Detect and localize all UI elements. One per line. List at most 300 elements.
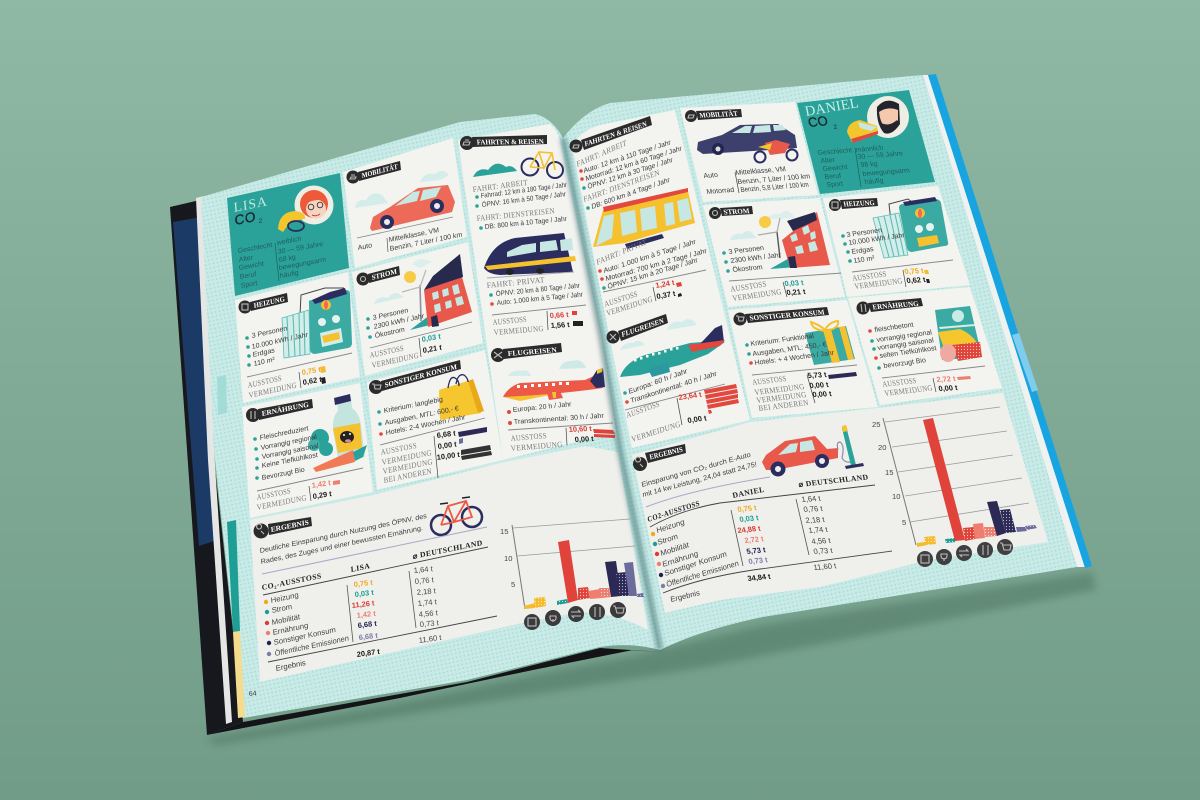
results table: Heizung — [656, 517, 685, 535]
emissions figures: AUSSTOSS — [852, 269, 887, 283]
emissions figures: 0,62 t — [906, 275, 927, 285]
bullet list: Vorrangig saisonal — [262, 443, 319, 461]
results table: 11,60 t — [813, 561, 838, 572]
bullet list — [377, 396, 466, 437]
bullet list: Flugreisen: Europa: 20 h / Jahr — [513, 401, 572, 414]
vehicle data: Mittelklasse, VM — [389, 227, 439, 244]
emissions figures: VERMEIDUNG — [854, 276, 903, 291]
trip list: Arbeit und Dienstreisen: FAHRT: ARBEIT — [576, 137, 627, 169]
emissions figures: 0,00 t — [437, 439, 458, 451]
bullet list — [722, 245, 782, 274]
bullet list — [245, 325, 309, 368]
icon: boiler and radiator — [873, 197, 948, 258]
chart category icons — [917, 539, 1013, 567]
results table: 0,76 t — [803, 504, 824, 514]
trip list: Privat — [486, 275, 584, 307]
emissions figures: AUSSTOSS — [247, 374, 282, 390]
emissions figures: 0,62 t — [302, 375, 323, 387]
emissions figures: Flugreisen: 23,64 t — [678, 390, 703, 402]
emissions figures: 0,03 t — [421, 332, 442, 344]
emissions figures: Flugreisen: 10,60 t — [568, 424, 593, 434]
trip list: Privat: Motorrad: 700 km à 2 Tage / Jahr — [605, 247, 708, 283]
profile data: häufig — [864, 178, 884, 186]
profile data — [817, 145, 911, 189]
trip list: Privat: ÖPNV: 15 km à 20 Tage / Jahr — [607, 256, 699, 291]
bullet list: 2300 kWh / Jahr — [374, 313, 425, 331]
results table: Öffentliche Emissionen — [274, 634, 349, 658]
results table: Ernährung — [662, 549, 699, 569]
profile data: männlich — [855, 145, 884, 154]
results table: 0,75 t — [353, 578, 374, 589]
results table: Ernährung — [272, 621, 309, 637]
trip list: Arbeit: DB: 800 km à 10 Tage / Jahr — [485, 216, 568, 231]
heading: Heizung: HEIZUNG — [253, 294, 285, 310]
emissions figures: Fahrten: AUSSTOSS — [492, 315, 527, 327]
emissions figures: Fahrten: 0,37 t — [656, 289, 677, 301]
icon: train — [484, 233, 576, 278]
emissions figures — [256, 468, 363, 512]
emissions figures: VERMEIDUNG — [248, 381, 297, 400]
results table: 0,73 t — [748, 555, 769, 566]
CO2 mark — [807, 113, 838, 131]
results table: 4,56 t — [418, 608, 439, 619]
profile data: weiblich — [276, 236, 302, 247]
bullet list: Flugreisen: Transkontinental: 30 h / Jahr — [514, 413, 605, 426]
emissions figures: AUSSTOSS — [730, 279, 768, 294]
bullet list: 3 Personen — [728, 245, 765, 256]
heading: Sonstiger Konsum — [734, 307, 829, 326]
emissions figures: Fahrten: VERMEIDUNG — [606, 295, 653, 318]
left edge colour strips — [217, 375, 245, 718]
emissions figures: Fahrten: 0,66 t — [549, 310, 570, 320]
profile data: bewegungsarm — [862, 167, 911, 178]
heading: Flugreisen — [491, 343, 562, 362]
emissions figures: Flugreisen: VERMEIDUNG — [631, 420, 681, 444]
emissions figures: VERMEIDUNG — [754, 382, 805, 397]
panel: Daniel Sonstiger Konsum — [728, 300, 878, 418]
profile data: 68 kg — [279, 254, 296, 264]
back cover and page stack — [170, 196, 660, 735]
panel: Daniel Ergebnis — [632, 393, 1048, 613]
heading: Ergebnis: ERGEBNIS — [270, 518, 309, 534]
icon: yellow tram — [593, 188, 695, 249]
results table: 2,18 t — [805, 515, 826, 525]
magazine shadow — [207, 572, 1096, 745]
panel: Lisa Ergebnis — [250, 446, 648, 682]
trip list: Privat: FAHRT: PRIVAT — [596, 237, 647, 267]
results table — [646, 472, 892, 604]
name: Lisa: LISA — [233, 193, 268, 215]
results table: Mobilität — [271, 612, 301, 627]
results table: Ergebnis — [275, 658, 306, 673]
heading: Ernährung: ERNÄHRUNG — [261, 400, 310, 418]
bullet list: vorrangig saisonal — [877, 337, 935, 352]
emissions figures: VERMEIDUNG — [756, 390, 807, 405]
emissions figures: Flugreisen: 0,00 t — [574, 434, 595, 444]
results table: 4,56 t — [811, 536, 832, 546]
icon: fridge, cheese and salami — [935, 306, 982, 362]
emissions figures: Fahrten — [492, 305, 586, 337]
heading: Fahrten und Reisen — [460, 135, 547, 150]
panel: Lisa Heizung — [235, 272, 360, 403]
bullet list: Hotels: + 4 Wochen / Jahr — [754, 350, 835, 367]
trip list: Arbeit und Dienstreisen: ÖPNV: 12 km à 30 Tage / Jahr — [587, 156, 674, 191]
heading: Flugreisen: FLUGREISEN — [621, 316, 665, 339]
heading: Sonstiger Konsum: SONSTIGER KONSUM — [384, 362, 457, 389]
profile data: Sport — [241, 280, 258, 290]
bullet list: Ökostrom — [732, 263, 763, 274]
left page — [201, 114, 660, 718]
heading: Strom: STROM — [723, 207, 751, 216]
vehicle data: Benzin, 7 Liter / 100 km — [390, 232, 463, 253]
emissions figures: VERMEIDUNG — [382, 457, 433, 476]
heading: Strom: STROM — [371, 267, 397, 282]
heading: Ernährung: ERNÄHRUNG — [872, 299, 920, 311]
heading: Strom — [709, 206, 753, 219]
bullet list: vorrangig regional — [876, 329, 933, 344]
emissions figures: AUSSTOSS — [380, 441, 417, 457]
trip list: Privat: FAHRT: PRIVAT — [486, 275, 545, 290]
trip list: Privat — [596, 237, 708, 291]
results table: ⌀ DEUTSCHLAND — [412, 538, 483, 561]
results table: 1,64 t — [413, 564, 434, 575]
trip list: Arbeit: FAHRT: DIENSTREISEN — [476, 206, 555, 223]
bar chart: Daniel: 5 — [902, 518, 906, 527]
emissions figures: 0,75 t — [301, 365, 322, 377]
heading: Ernährung — [856, 298, 923, 314]
chart category icons — [524, 602, 626, 630]
trip list: Arbeit und Dienstreisen: DB: 600 km à 4 Tage / Jahr — [591, 176, 671, 211]
emissions figures: Fahrten: VERMEIDUNG — [493, 324, 544, 337]
trip list: Privat: Auto: 1.000 km à 5 Tage / Jahr — [497, 291, 584, 307]
blue page edge — [923, 74, 1092, 568]
profile data: Beruf — [824, 173, 842, 181]
icon: house, sun and wind turbine — [730, 211, 830, 269]
vehicle data: Benzin, 5,8 Liter / 100 km — [740, 182, 810, 194]
emissions figures: Flugreisen: AUSSTOSS — [626, 399, 660, 420]
emissions figures: AUSSTOSS — [256, 486, 291, 502]
results table: 0,03 t — [354, 588, 375, 599]
results table: 1,64 t — [801, 494, 822, 504]
emissions figures: VERMEIDUNG — [256, 493, 307, 512]
results table: 0,76 t — [414, 575, 435, 586]
results table: 1,42 t — [356, 609, 377, 620]
emissions figures — [882, 366, 985, 398]
results table: 2,18 t — [416, 586, 437, 597]
profile data: 30 — 59 Jahre — [278, 241, 323, 256]
profile data: Gewicht — [822, 164, 848, 173]
emissions figures: 0,03 t — [784, 278, 805, 288]
trip list: Privat: Auto: 1.000 km à 5 Tage / Jahr — [603, 238, 697, 275]
emissions figures — [380, 418, 492, 485]
bullet list — [745, 333, 835, 367]
CO2 mark: 2 — [259, 218, 263, 225]
emissions figures: 0,00 t — [938, 383, 959, 393]
icon: teal plane — [620, 319, 725, 377]
results table: 34,84 t — [747, 572, 772, 583]
vehicle data — [357, 217, 463, 253]
panel: Lisa Fahrten, Reisen und Flugreisen — [458, 124, 616, 460]
bullet list: Flugreisen — [507, 401, 605, 426]
emissions figures: 0,21 t — [786, 287, 807, 297]
profile data — [238, 236, 326, 290]
bullet list: 3 Personen — [373, 307, 409, 322]
trip list: Arbeit: Fahrrad: 12 km à 180 Tage / Jahr — [481, 182, 568, 200]
name: Daniel: DANIEL — [804, 95, 861, 120]
emissions figures: 1,42 t — [311, 478, 332, 490]
bullet list: Erdgas — [253, 347, 276, 359]
emissions figures: 5,73 t — [807, 370, 828, 380]
page number: 64 — [249, 690, 257, 698]
bullet list: Ausgaben, MTL: 600,- € — [385, 405, 459, 427]
bullet list — [868, 322, 937, 370]
profile data: 30 — 59 Jahre — [857, 150, 904, 161]
bullet list — [366, 307, 425, 340]
icon: boiler and radiator — [282, 288, 352, 358]
vehicle data: Motorrad — [706, 187, 735, 196]
icon: shopping bag — [439, 375, 484, 420]
profile data: häufig — [280, 270, 299, 280]
results table: Strom — [657, 532, 679, 547]
icon: red plane — [503, 360, 605, 401]
bullet list: Ausgaben, MTL: 450,- € — [752, 341, 827, 358]
emissions figures: VERMEIDUNG — [732, 287, 782, 303]
heading: Fahrten und Reisen: FAHRTEN & REISEN — [476, 138, 545, 146]
heading: Heizung — [829, 198, 878, 211]
heading: Flugreisen: FLUGREISEN — [507, 346, 558, 358]
emissions figures: Fahrten — [603, 270, 706, 318]
result text: Deutliche Einsparung durch Nutzung des ÖPNV, des — [259, 512, 428, 555]
CO2 mark: CO — [807, 113, 829, 130]
emissions figures: Fahrten: AUSSTOSS — [604, 289, 638, 309]
result text: Rades, des Zuges und einer bewussten Ernährung. — [261, 525, 423, 566]
heading: Mobilität: MOBILITÄT — [699, 109, 739, 120]
bullet list: Flugreisen: Transkontinental: 40 h / Jahr — [630, 369, 718, 405]
bullet list: 3 Personen — [846, 227, 883, 239]
emissions figures: 0,75 t — [904, 266, 925, 276]
trip list: Arbeit — [472, 178, 568, 231]
results table: 5,73 t — [746, 545, 767, 556]
icon: electric car at charger — [762, 425, 864, 476]
results table: CO₂-AUSSTOSS — [261, 571, 322, 592]
emissions figures: AUSSTOSS — [369, 344, 404, 360]
profile data: Beruf — [240, 271, 257, 281]
results table: 0,73 t — [813, 546, 834, 556]
results table: 24,88 t — [737, 524, 762, 535]
profile data: 98 kg — [860, 161, 878, 169]
icon: house, sun and wind turbine — [374, 254, 472, 330]
results table: CO2-AUSSTOSS — [647, 499, 701, 524]
trip list: Arbeit: FAHRT: ARBEIT — [472, 178, 528, 194]
bullet list: Kriterium: langlebig — [384, 396, 443, 415]
heading: Flugreisen — [606, 314, 668, 344]
emissions figures: BEI ANDEREN — [383, 466, 432, 485]
emissions figures: 10,00 t — [436, 450, 461, 462]
trip list: Privat: ÖPNV: 20 km à 80 Tage / Jahr — [495, 282, 581, 298]
bullet list: selten Tiefkühlkost — [879, 345, 937, 360]
profile data: Geschlecht — [238, 242, 273, 255]
bar chart: Lisa: 15 — [500, 527, 508, 536]
bullet list: Vorrangig regional — [261, 434, 318, 452]
emissions figures: AUSSTOSS — [882, 376, 917, 389]
emissions figures: 0,29 t — [312, 489, 333, 501]
bullet list: 2300 kWh / Jahr — [730, 252, 782, 265]
spine shadow — [563, 138, 660, 650]
panel: Daniel Fahrten, Reisen und Flugreisen — [570, 110, 750, 448]
bar chart: Lisa: 5 — [511, 580, 515, 589]
emissions figures: Flugreisen: 0,00 t — [687, 413, 708, 425]
results table: Öffentliche Emissionen — [666, 559, 739, 589]
panel: Daniel Mobilität — [680, 102, 818, 202]
result text: mit 14 kw Leistung, 24,04 statt 24,75! — [642, 460, 757, 499]
results table: 6,68 t — [358, 631, 379, 642]
results table: Ergebnis — [670, 588, 701, 604]
results table: Sonstiger Konsum — [664, 549, 728, 578]
results table: DANIEL — [732, 485, 765, 500]
results table: Sonstiger Konsum — [273, 625, 336, 647]
bullet list: 10.000 kWh / Jahr — [848, 232, 906, 247]
results table: 2,72 t — [744, 534, 765, 545]
emissions figures — [369, 322, 472, 370]
bar chart: Daniel: 20 — [878, 443, 886, 452]
bullet list: Erdgas — [851, 246, 875, 256]
results table: 6,68 t — [357, 619, 378, 630]
results table: 11,26 t — [351, 598, 375, 610]
bullet list: fleischbetont — [874, 322, 914, 334]
bullet list: 10.000 kWh / Jahr — [252, 332, 309, 351]
emissions figures: VERMEIDUNG — [884, 383, 933, 398]
profile data: Gewicht — [239, 261, 264, 272]
bullet list: Fleischreduziert — [260, 425, 309, 442]
trip list: Arbeit und Dienstreisen: FAHRT: DIENSTREISEN — [583, 168, 660, 204]
vehicle data — [703, 166, 811, 196]
emissions figures: Flugreisen: VERMEIDUNG — [510, 440, 563, 453]
emissions figures: VERMEIDUNG — [381, 448, 432, 467]
emissions figures: 0,21 t — [422, 343, 443, 355]
results table: Mobilität — [660, 540, 690, 558]
panel: Lisa Mobilität — [343, 138, 467, 268]
bar chart: Daniel: 15 — [885, 468, 893, 477]
bullet list: Keine Tiefkühlkost — [262, 452, 318, 470]
results table — [261, 527, 497, 673]
bullet list: bevorzugt Bio — [883, 357, 927, 370]
emissions figures: Fahrten: 1,24 t — [655, 278, 676, 290]
results table: 0,75 t — [737, 503, 758, 514]
profile data: bewegungsarm — [279, 257, 326, 272]
profile data: Sport — [826, 181, 844, 189]
panel: Daniel profile — [797, 90, 935, 194]
result text: Einsparung von CO₂ durch E-Auto — [641, 451, 751, 489]
bullet list — [841, 227, 906, 265]
emissions figures: 0,00 t — [809, 380, 830, 390]
vehicle data: Mittelklasse, VM — [735, 166, 787, 177]
bar chart: Daniel — [872, 407, 1037, 547]
emissions figures: 6,68 t — [436, 428, 457, 440]
heading: Fahrten und Reisen: FAHRTEN & REISEN — [584, 119, 648, 148]
trip list: Arbeit: ÖPNV: 16 km à 50 Tage / Jahr — [481, 190, 567, 209]
bar chart: Daniel: 10 — [892, 492, 900, 501]
trip list: Arbeit und Dienstreisen — [576, 137, 683, 211]
results table: Strom — [271, 602, 292, 615]
bullet list: Bevorzugt Bio — [262, 466, 305, 482]
CO2 mark: CO — [234, 209, 256, 228]
emissions figures: Flugreisen: AUSSTOSS — [510, 431, 547, 443]
emissions figures — [852, 260, 953, 291]
heading: Ergebnis — [633, 444, 686, 471]
panel: Lisa Sonstiger Konsum — [367, 350, 503, 490]
bullet list: 110 m² — [254, 356, 276, 368]
icon: milk bottle, tree and carrot — [308, 394, 367, 472]
emissions figures: BEI ANDEREN — [758, 398, 809, 413]
results table: 0,03 t — [739, 513, 760, 524]
panel: Lisa Strom — [352, 242, 483, 376]
heading: Fahrten und Reisen — [570, 116, 652, 152]
bar chart: Daniel: 25 — [872, 420, 880, 429]
icon: cloud and yellow bicycle — [473, 152, 563, 178]
profile data: Alter — [239, 254, 254, 264]
bar chart: Lisa: 10 — [504, 554, 512, 563]
trip list: Arbeit und Dienstreisen: Motorrad: 12 km à 60 Tage / Jahr — [585, 144, 683, 183]
profile data: Geschlecht — [817, 147, 853, 157]
emissions figures — [752, 365, 857, 413]
results table: Heizung — [270, 590, 299, 605]
bar chart: Lisa — [500, 519, 644, 609]
results table: 1,74 t — [808, 525, 829, 535]
emissions figures: Flugreisen — [625, 384, 739, 444]
panel: Daniel Ernährung — [848, 287, 1002, 405]
panel: Lisa profile — [227, 173, 349, 296]
heading: Ergebnis: ERGEBNIS — [649, 445, 683, 461]
icon: Daniel portrait with helmet — [847, 96, 909, 143]
vehicle data: Auto — [358, 242, 372, 252]
emissions figures: AUSSTOSS — [752, 374, 787, 387]
heading: Heizung: HEIZUNG — [843, 199, 876, 208]
trip list: Arbeit und Dienstreisen: Auto: 12 km à 110 Tage / Jahr — [583, 138, 672, 175]
bullet list: 3 Personen — [252, 325, 288, 340]
bullet list — [253, 425, 319, 482]
heading: Mobilität: MOBILITÄT — [361, 162, 398, 180]
bullet list: Hotels: 2-4 Wochen / Jahr — [386, 414, 466, 437]
right page — [563, 75, 1077, 650]
heading: Sonstiger Konsum: SONSTIGER KONSUM — [749, 309, 826, 322]
emissions figures: 2,72 t — [936, 374, 957, 384]
results table: 0,73 t — [419, 618, 440, 629]
icon: Lisa portrait with helmet — [278, 186, 334, 232]
heading: Ergebnis — [254, 517, 312, 538]
bullet list: Ökostrom — [374, 325, 405, 340]
results table: LISA — [350, 561, 371, 574]
CO2 mark: 2 — [833, 125, 838, 131]
emissions figures — [729, 273, 842, 303]
results table: 1,74 t — [417, 597, 438, 608]
vehicle data: Auto — [703, 172, 719, 180]
bullet list: 110 m² — [853, 255, 876, 265]
panel: Daniel Strom — [703, 198, 845, 307]
panel: Lisa Ernährung — [242, 383, 373, 518]
vehicle data: Benzin, 7 Liter / 100 km — [737, 173, 811, 186]
bullet list: Kriterium: Funktional — [750, 333, 815, 348]
results table: 11,60 t — [418, 633, 443, 645]
emissions figures: Flugreisen — [508, 423, 615, 453]
icon: gift box — [805, 321, 855, 365]
results table: ⌀ DEUTSCHLAND — [798, 472, 869, 489]
emissions figures: 0,00 t — [812, 389, 833, 399]
emissions figures: Fahrten: 1,56 t — [550, 320, 571, 330]
emissions figures — [247, 353, 352, 400]
bullet list: Flugreisen: Europa: 60 h / Jahr — [628, 367, 689, 396]
results table: 20,87 t — [356, 647, 381, 659]
icon: red car — [355, 171, 455, 231]
